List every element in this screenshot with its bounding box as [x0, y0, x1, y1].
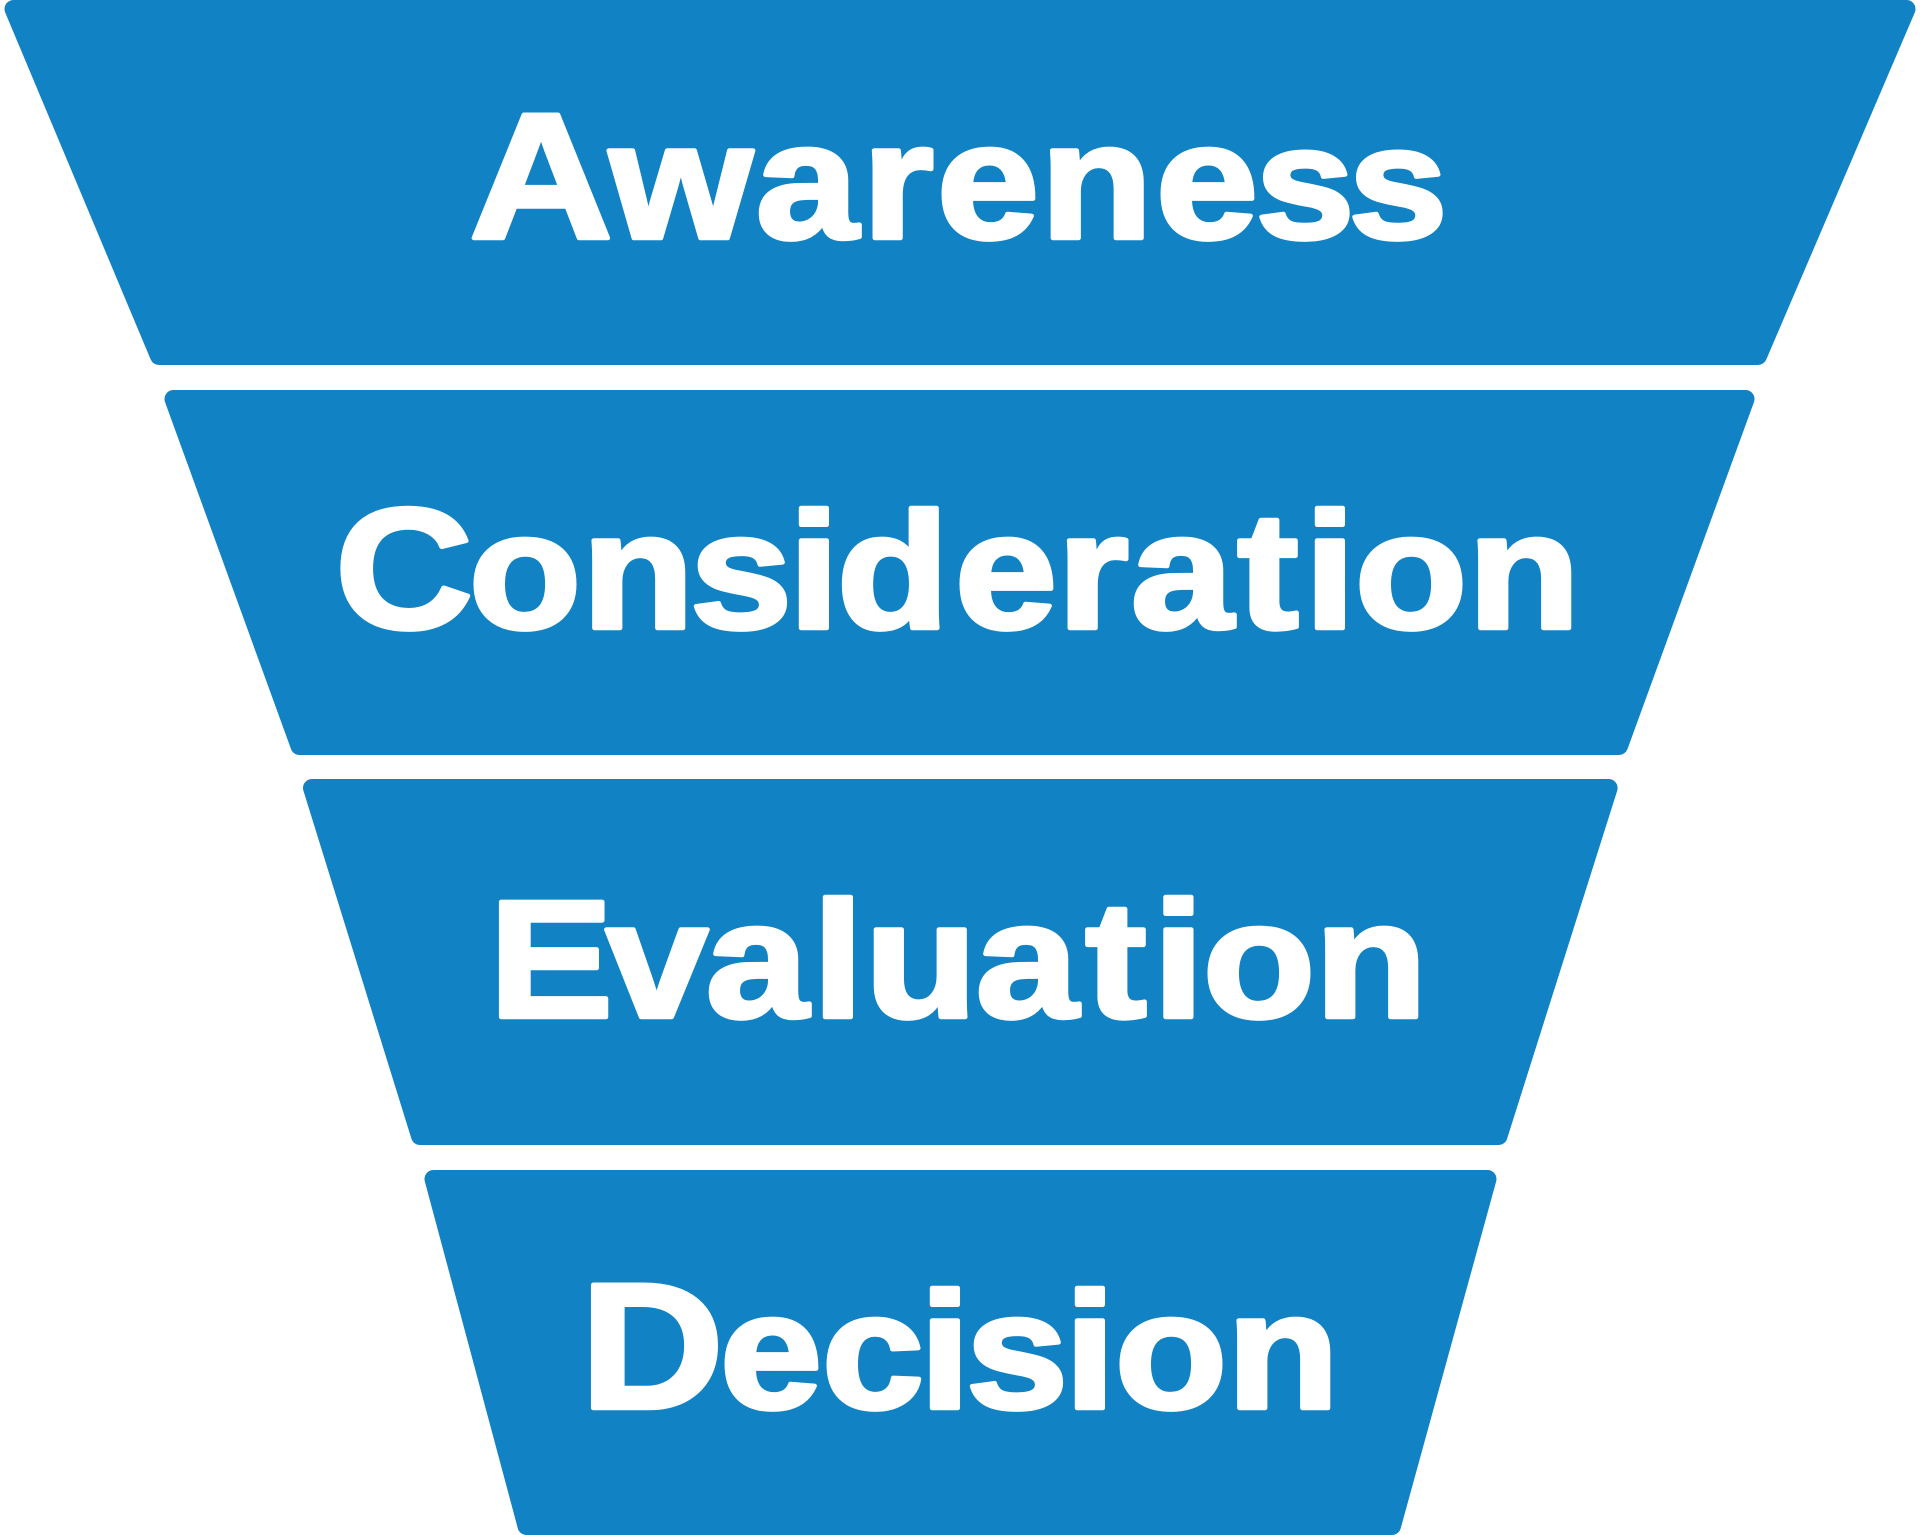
consideration shape — [174, 399, 1746, 746]
decision shape — [434, 1179, 1488, 1526]
heading: consideration: Consideration — [335, 473, 1580, 665]
heading: evaluation: Evaluation — [489, 867, 1427, 1053]
panel: awareness — [14, 9, 1906, 356]
heading: awareness: Awareness — [469, 77, 1448, 277]
panel: evaluation — [312, 788, 1609, 1136]
panel: consideration — [174, 399, 1746, 746]
panel: decision — [434, 1179, 1488, 1526]
evaluation shape — [312, 788, 1609, 1136]
awareness shape — [14, 9, 1906, 356]
heading: decision: Decision — [580, 1247, 1339, 1447]
